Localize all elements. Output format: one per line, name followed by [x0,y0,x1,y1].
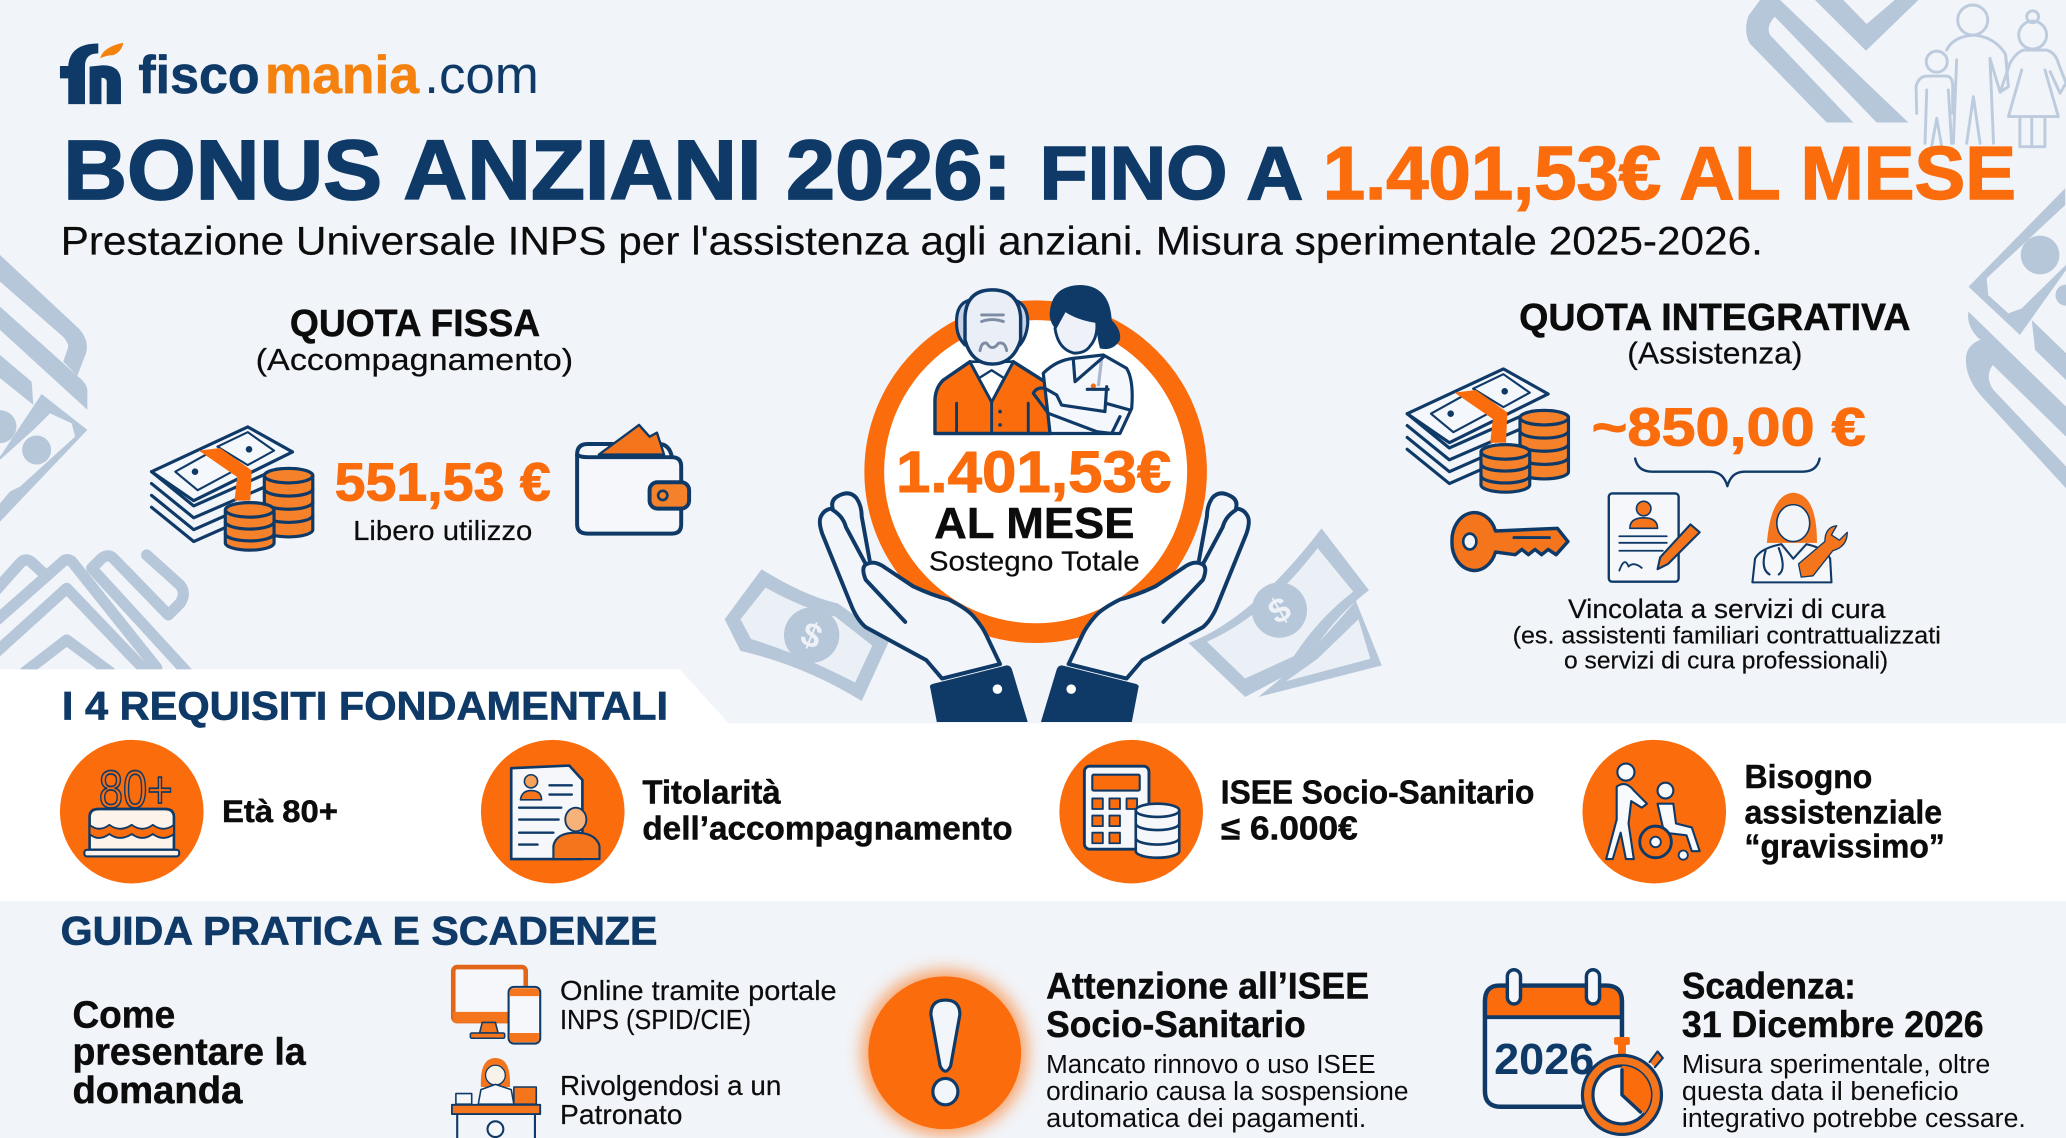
title: BONUS ANZIANI 2026: [63,123,1012,217]
patronato channel text [560,1070,781,1130]
amount 551,53: 551,53 € [335,453,551,513]
quota integrativa heading: QUOTA INTEGRATIVA [1519,296,1911,339]
background bill left: $ [795,615,827,657]
orange ring [874,310,1197,633]
panel: requirements white band [0,669,2066,901]
logo: fiscomania.com: mania [265,46,420,105]
warning text: ordinario causa la sospensione [1046,1076,1409,1106]
deadline text: Misura sperimentale, oltre [1682,1049,1990,1079]
warning text: Mancato rinnovo o uso ISEE [1046,1049,1376,1079]
icon: birthday cake [60,740,204,883]
bound to care services note: Vincolata a servizi di cura [1568,594,1887,624]
per month label: AL MESE [934,500,1134,548]
icon: nurse [1033,285,1132,433]
bound to care services note [1513,594,1941,675]
patronato channel text: Patronato [560,1099,683,1130]
age label: Età 80+ [222,793,338,829]
online channel text [560,975,837,1035]
requirement: ISEE [1059,740,1534,883]
icon: document with person [481,740,625,883]
requirement text: “gravissimo” [1745,828,1945,865]
requirement text [642,774,1013,846]
subtitle: Prestazione Universale INPS per l'assistenza agli anziani. Misura sperimentale 2025-2026. [61,219,1763,263]
background bill right [1188,528,1382,697]
requirement text: Titolarità [642,774,781,811]
requirement text [1745,758,1945,865]
icon: left hand [820,493,1028,722]
background decoration: top right bands [1746,0,1918,123]
icon: computer and phone [453,967,540,1044]
icon: key [1452,513,1568,570]
quota fissa heading: QUOTA FISSA [290,302,540,345]
requirement text: ISEE Socio-Sanitario [1221,774,1534,811]
background decoration: family outline [1916,5,2066,147]
logo: fiscomania.com: .com [424,46,539,105]
deadline text: Scadenza: [1682,966,1856,1007]
requirement: age 80+ [60,740,338,883]
icon: stopwatch [1582,1037,1663,1134]
icon: wallet [577,425,689,534]
brace [1635,459,1820,486]
requirement text: Bisogno [1745,758,1872,795]
how to apply text: domanda [72,1069,243,1112]
icon: money stack [152,427,313,550]
bound to care services note: o servizi di cura professionali) [1564,649,1888,675]
how to apply text: presentare la [72,1031,306,1074]
requirement text: dell’accompagnamento [642,809,1013,846]
title [63,123,2016,217]
requirement text: ≤ 6.000€ [1221,809,1358,846]
amount 850: ~850,00 € [1592,397,1866,457]
free use label: Libero utilizzo [353,515,532,546]
deadline text: questa data il beneficio [1682,1076,1959,1106]
background decoration: left bands and bill [0,255,87,522]
requirement text [1221,774,1534,846]
warning text: Attenzione all’ISEE [1046,966,1369,1007]
icon: warning [862,970,1028,1136]
requirement: severe care need [1582,740,1945,883]
warning text [1046,966,1409,1133]
total amount: 1.401,53€ [896,441,1171,505]
icon: care professional [1752,493,1847,582]
logo: fiscomania.com: fisco [138,46,260,105]
online channel text: Online tramite portale [560,975,837,1006]
icon: signed document [1609,493,1700,582]
total support label: Sostegno Totale [929,546,1140,577]
panel: total amount circle [874,285,1197,633]
panel: quota fissa [152,302,689,550]
background bill left [725,569,889,701]
quota integrativa subheading: (Assistenza) [1627,338,1802,371]
icon: birthday cake: 80+ [99,761,173,820]
logo: fiscomania.com [60,43,539,105]
requirement text: assistenziale [1745,793,1942,830]
quota fissa subheading: (Accompagnamento) [256,344,573,377]
how to apply text: Come [72,994,175,1037]
how to apply text [72,994,306,1112]
background decoration: bottom left chevrons [0,555,187,672]
icon: wheelchair and carer [1582,740,1726,883]
icon: patronato desk [452,1058,540,1138]
icon: calculator and coins [1059,740,1203,883]
patronato channel text: Rivolgendosi a un [560,1070,781,1101]
icon: right hand [1041,493,1249,722]
heading: guida pratica: GUIDA PRATICA E SCADENZE [61,910,657,954]
icon: calendar [1485,970,1622,1107]
background bill right: $ [1262,590,1298,632]
warning text: Socio-Sanitario [1046,1004,1306,1045]
bound to care services note: (es. assistenti familiari contrattualizzati [1513,624,1941,650]
deadline text [1682,966,2026,1133]
icon: calendar: 2026 [1494,1036,1594,1084]
warning text: automatica dei pagamenti. [1046,1103,1366,1133]
title: FINO A [1040,131,1303,215]
icon: elderly man [935,290,1050,433]
deadline text: 31 Dicembre 2026 [1682,1004,1984,1045]
deadline text: integrativo potrebbe cessare. [1682,1103,2026,1133]
background decoration: right bands and bill [1966,188,2066,488]
icon: money stack [1407,369,1568,492]
requirement: accompagnamento [481,740,1013,883]
heading: requisiti: I 4 REQUISITI FONDAMENTALI [62,684,668,728]
title: 1.401,53€ AL MESE [1323,131,2016,215]
panel: quota integrativa [1407,296,1941,675]
online channel text: INPS (SPID/CIE) [560,1004,751,1035]
